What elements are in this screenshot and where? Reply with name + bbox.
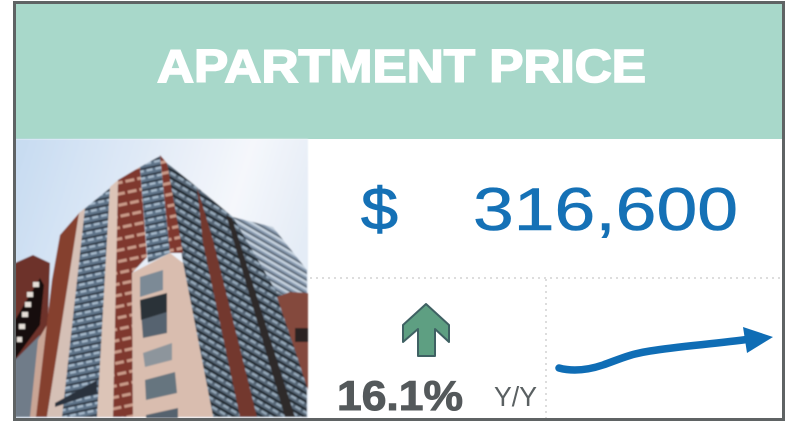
dotted dividers xyxy=(310,278,783,418)
year over year label: Y/Y xyxy=(494,381,537,412)
title: APARTMENT PRICE xyxy=(157,40,646,92)
icon: green up arrow xyxy=(403,304,449,356)
photo: apartment tower xyxy=(15,139,308,418)
price: value: 316,600 xyxy=(473,176,738,243)
header band xyxy=(15,3,783,139)
percentage change: 16.1% xyxy=(337,372,463,419)
trend arrow xyxy=(559,327,773,370)
price: dollar sign: $ xyxy=(361,176,398,242)
